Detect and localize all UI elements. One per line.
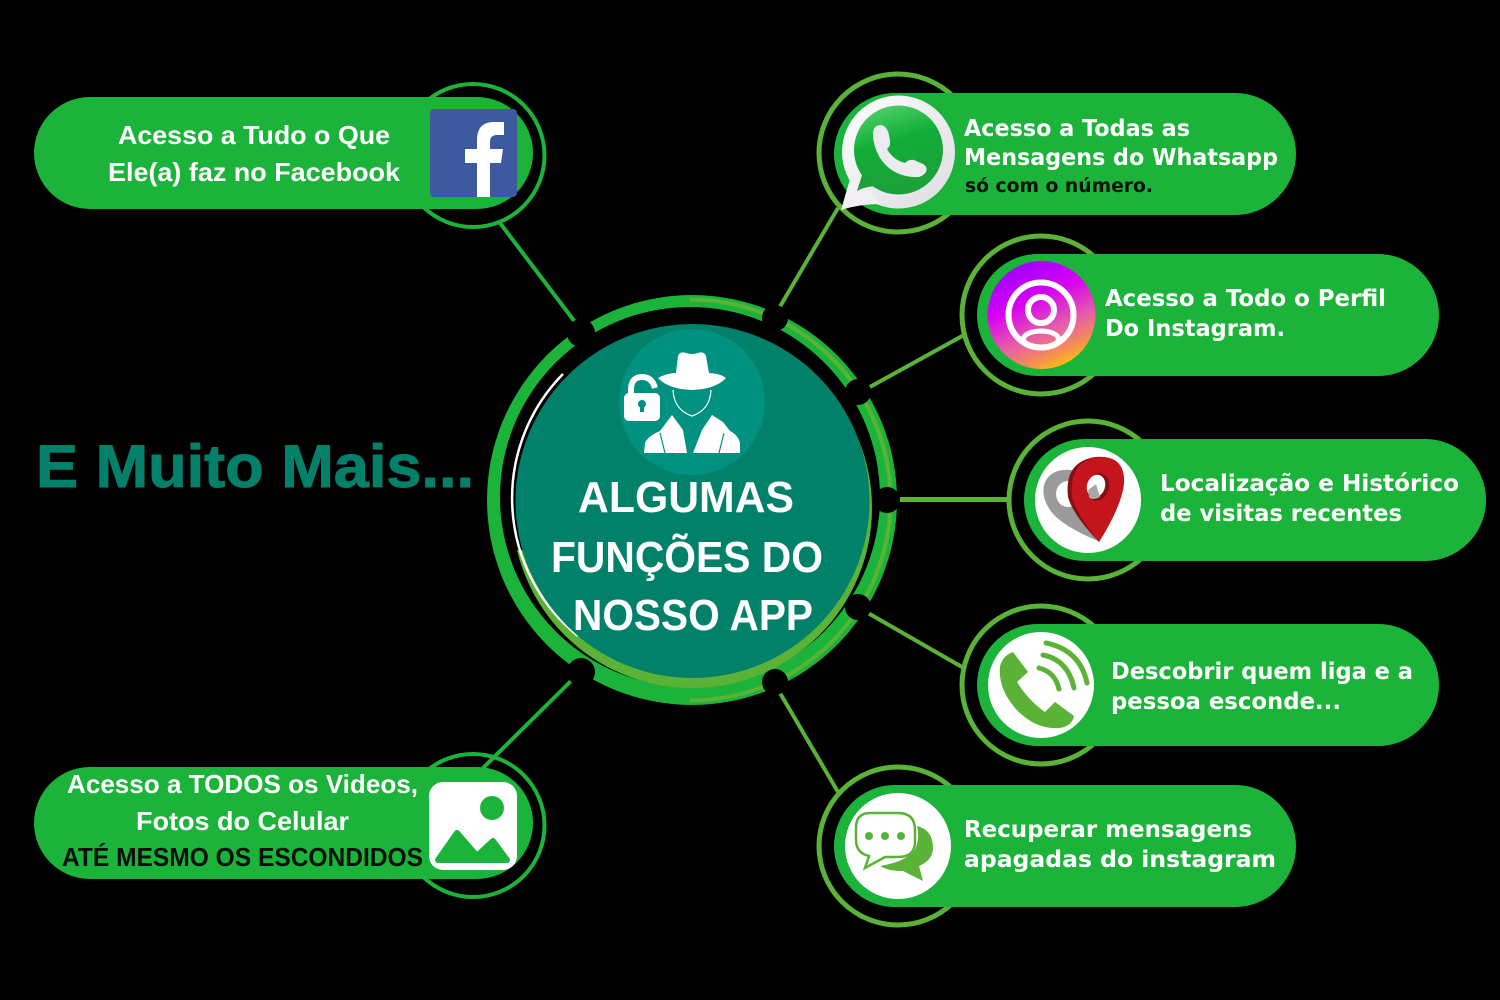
icon: Instagram profile — [988, 261, 1096, 369]
panel text: photos: Acesso a TODOS os Videos, — [67, 769, 418, 799]
panel text: location: de visitas recentes — [1160, 499, 1402, 527]
icon: phone — [988, 632, 1094, 738]
panel text: location: Localização e Histórico — [1160, 469, 1459, 497]
hub white edge — [512, 374, 578, 636]
icon: spy with hat — [644, 352, 740, 453]
hub title: NOSSO APP — [573, 591, 813, 640]
panel text: WhatsApp: Acesso a Todas as — [964, 114, 1190, 142]
icon: open padlock — [624, 377, 660, 421]
panel text: Instagram: Acesso a Todo o Perfil — [1105, 284, 1386, 312]
panel text: WhatsApp — [964, 114, 1278, 197]
icon: Facebook — [430, 109, 517, 197]
panel text: photos: Fotos do Celular — [136, 806, 349, 836]
panel text: recover messages: Recuperar mensagens — [964, 815, 1252, 843]
hub outer ring — [487, 295, 897, 705]
panel text: Instagram — [1105, 284, 1386, 342]
hub title — [551, 473, 823, 640]
hub lower crescent — [517, 434, 872, 688]
panel text: calls: pessoa esconde... — [1111, 687, 1341, 715]
icon: image — [429, 782, 517, 870]
panel: calls — [962, 606, 1439, 764]
icon: chat bubbles — [845, 793, 951, 899]
panel: Facebook — [34, 84, 544, 227]
icon: map pin — [1035, 447, 1141, 553]
hub title: FUNÇÕES DO — [551, 532, 823, 582]
panel text: calls: Descobrir quem liga e a — [1111, 657, 1413, 685]
panel: location — [1009, 421, 1486, 579]
panel text: photos: ATÉ MESMO OS ESCONDIDOS — [62, 842, 423, 872]
hub title: ALGUMAS — [578, 473, 794, 522]
hub black gap — [500, 307, 880, 687]
panel text: recover messages — [964, 815, 1276, 873]
panel text: WhatsApp: só com o número. — [965, 175, 1153, 197]
hub light ring band — [690, 300, 891, 700]
panel text: Facebook: Acesso a Tudo o Que — [118, 120, 390, 150]
panel text: recover messages: apagadas do instagram — [964, 845, 1276, 873]
connector lines — [483, 208, 1008, 792]
panel text: location — [1160, 469, 1459, 527]
panel: recover messages — [819, 767, 1296, 925]
panel text: Facebook: Ele(a) faz no Facebook — [108, 157, 401, 187]
icon: WhatsApp — [841, 96, 955, 210]
panel text: calls — [1111, 657, 1413, 715]
hub teal disc — [516, 324, 870, 678]
panel: WhatsApp — [819, 74, 1296, 232]
panel text: Instagram: Do Instagram. — [1105, 314, 1285, 342]
connector nodes — [567, 305, 900, 695]
heading: E Muito Mais: E Muito Mais... — [36, 433, 474, 500]
panel: Instagram — [962, 236, 1439, 394]
panel: photos — [34, 754, 544, 897]
panel text: WhatsApp: Mensagens do Whatsapp — [964, 143, 1278, 171]
hub icon disc — [619, 329, 765, 475]
panel text: photos — [62, 769, 423, 872]
panel text: Facebook — [108, 120, 401, 187]
central hub — [487, 295, 897, 705]
